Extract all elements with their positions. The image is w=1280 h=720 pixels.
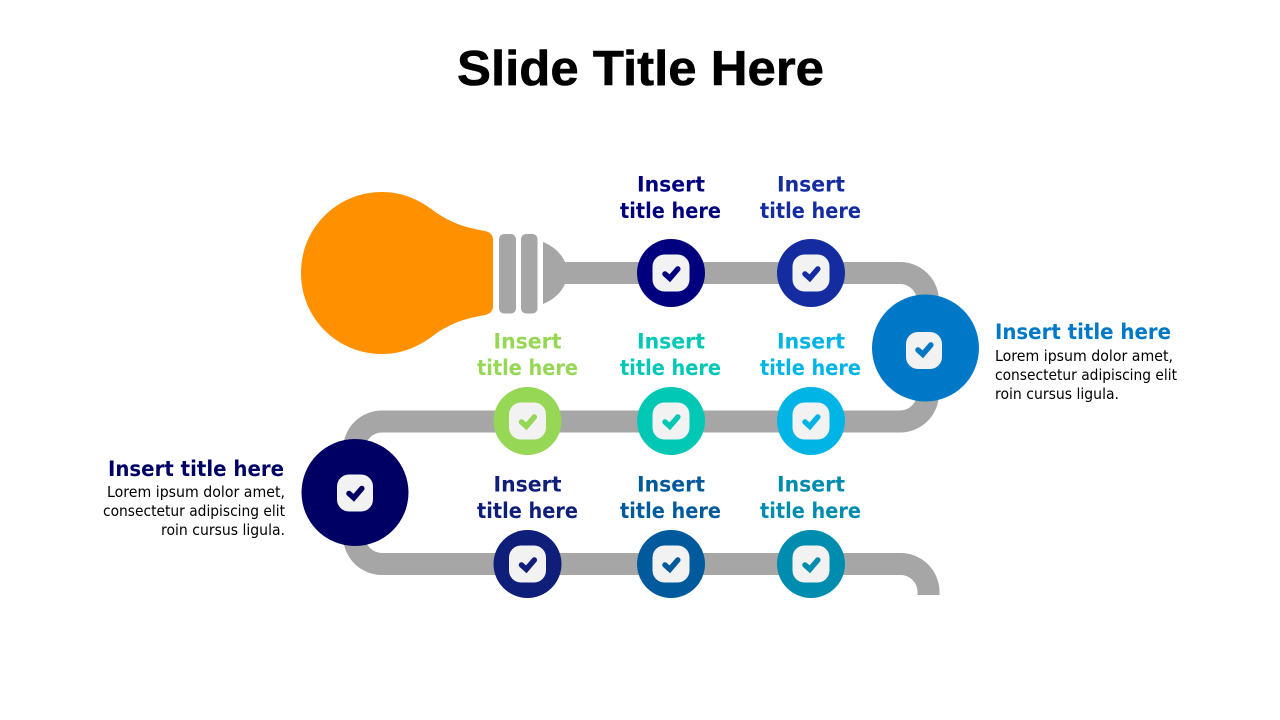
step: right large node — [872, 294, 1177, 403]
step: bottom row centre — [620, 472, 721, 598]
body text: roin cursus ligula. — [995, 385, 1119, 403]
node with check icon — [777, 530, 845, 598]
node with check icon — [777, 239, 845, 307]
node with check icon — [637, 239, 705, 307]
node with check icon — [494, 387, 562, 455]
winding grey cable path — [354, 273, 928, 595]
node with check icon — [777, 387, 845, 455]
node with check icon — [302, 439, 408, 546]
node with check icon — [872, 294, 979, 402]
node with check icon — [637, 387, 705, 455]
label: title here — [620, 356, 721, 380]
screw base ring 2 — [521, 234, 538, 314]
label: Insert — [777, 330, 845, 354]
icon: light bulb — [301, 192, 565, 354]
label: title here — [620, 499, 721, 523]
label: Insert — [637, 172, 705, 196]
body text: consectetur adipiscing elit — [103, 502, 285, 520]
step: left large node — [103, 439, 408, 546]
step: bottom row left — [477, 472, 578, 598]
body text: roin cursus ligula. — [161, 521, 285, 539]
label: title here — [760, 499, 861, 523]
step: middle row centre — [620, 330, 721, 455]
label: Insert — [777, 472, 845, 496]
label: Insert — [494, 472, 562, 496]
label: Insert — [494, 330, 562, 354]
node with check icon — [494, 530, 562, 598]
step: bottom row right — [760, 472, 861, 598]
label: title here — [477, 499, 578, 523]
heading: Insert title here — [995, 320, 1171, 344]
label: Insert — [777, 172, 845, 196]
body text: consectetur adipiscing elit — [995, 366, 1177, 384]
label: Insert — [637, 330, 705, 354]
label: Insert — [637, 472, 705, 496]
step: middle row right — [760, 330, 861, 455]
node with check icon — [637, 530, 705, 598]
label: title here — [620, 199, 721, 223]
bulb base cap — [543, 242, 565, 304]
label: title here — [760, 199, 861, 223]
heading: Insert title here — [108, 457, 284, 481]
body text: Lorem ipsum dolor amet, — [995, 347, 1173, 365]
title: Slide Title Here — [457, 42, 824, 96]
label: title here — [477, 356, 578, 380]
bulb glass — [301, 192, 493, 354]
step: top row 1 — [620, 172, 721, 307]
step: middle row left — [477, 330, 578, 455]
label: title here — [760, 356, 861, 380]
body text: Lorem ipsum dolor amet, — [107, 483, 285, 501]
step: top row 2 — [760, 172, 861, 307]
screw base ring 1 — [499, 234, 516, 314]
